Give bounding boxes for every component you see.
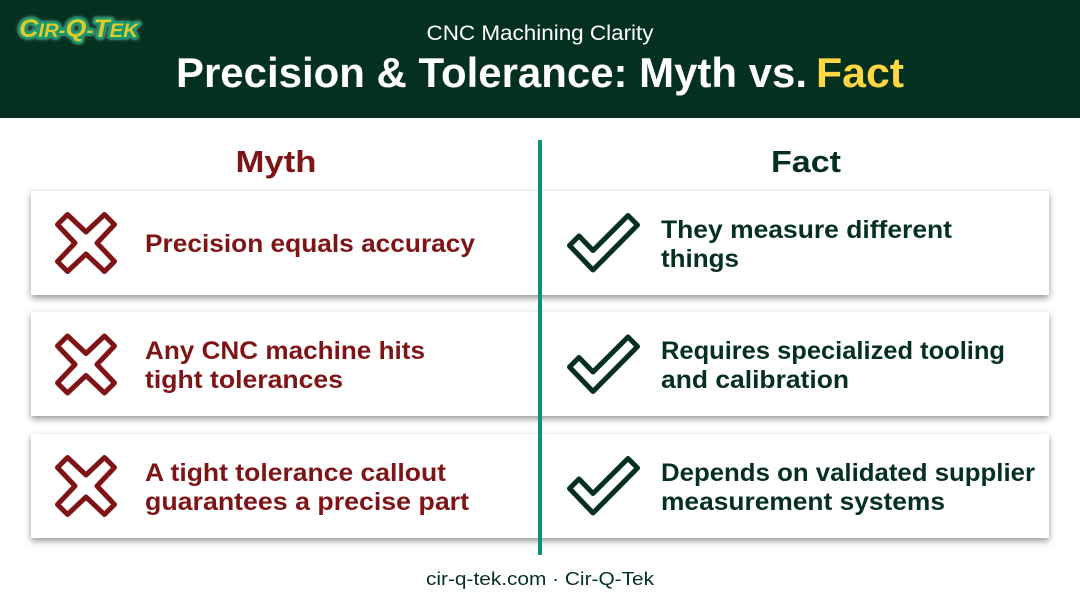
fact 3 text: measurement systems: [661, 488, 945, 516]
logo: CIR-Q-TEK: [19, 15, 139, 43]
heading: Myth: Myth: [236, 144, 316, 179]
myth 1 text: Precision equals accuracy: [145, 230, 475, 258]
heading: Fact: Fact: [771, 144, 841, 179]
myth 2 text: [145, 337, 425, 394]
myth 2 text: Any CNC machine hits: [145, 337, 425, 365]
myth 2 text: tight tolerances: [145, 366, 343, 394]
icon: check 2: [570, 337, 638, 392]
fact 1 text: They measure different: [661, 216, 953, 244]
fact 2 text: and calibration: [661, 366, 849, 394]
fact 1 text: things: [661, 245, 739, 273]
title highlight: Fact: Fact: [816, 49, 904, 96]
row 1 card: [31, 191, 1049, 295]
title: Precision & Tolerance: Myth vs.: [176, 49, 807, 96]
subtitle: CNC Machining Clarity: [426, 22, 654, 45]
icon: check 3: [570, 458, 638, 513]
myth 3 text: [145, 459, 470, 516]
myth 3 text: guarantees a precise part: [145, 488, 470, 516]
icon: cross 2: [58, 336, 114, 393]
icon: cross 1: [58, 214, 114, 272]
fact 2 text: [661, 337, 1005, 394]
fact 2 text: Requires specialized tooling: [661, 337, 1005, 365]
row 3 card: [31, 434, 1049, 538]
fact 3 text: [661, 459, 1035, 516]
center divider: [538, 140, 542, 555]
row 2 card: [31, 312, 1049, 416]
icon: cross 3: [58, 458, 114, 514]
fact 1 text: [661, 216, 953, 273]
footer: cir-q-tek.com · Cir-Q-Tek: [426, 569, 655, 589]
fact 3 text: Depends on validated supplier: [661, 459, 1035, 487]
header band: [0, 0, 1080, 118]
icon: check 1: [570, 216, 638, 270]
myth 3 text: A tight tolerance callout: [145, 459, 447, 487]
